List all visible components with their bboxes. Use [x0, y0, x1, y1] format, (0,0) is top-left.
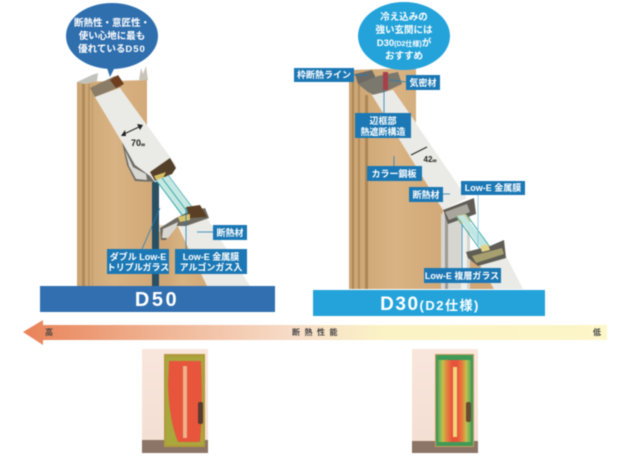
glass triple [152, 175, 195, 286]
label: airtight material: 気密材 [409, 77, 437, 88]
callout: D30 bubble: D30(D2仕様)が [377, 37, 432, 49]
dimension: 42: 42㎜ [424, 155, 436, 164]
label: color steel sheet: カラー鋼板 [371, 168, 417, 179]
callout: D30 bubble: 強い玄関には [375, 24, 433, 36]
label: color steel sheet [367, 156, 422, 181]
dimension: 70 [121, 124, 145, 148]
label: triple glass [107, 208, 169, 274]
label: Low-E metal film: Low-E 金属膜 [465, 182, 521, 193]
label: 断熱材 D50: 断熱材 [216, 227, 244, 238]
panel: D50 door section [77, 66, 250, 286]
label: Low-E double glazing [424, 224, 501, 283]
label: argon gas: アルゴンガス入 [180, 262, 242, 272]
label: edge thermal break: 辺框部 [369, 115, 397, 126]
door frame: wood face [349, 68, 443, 289]
insulation core lower [179, 218, 250, 286]
callout: D50 bubble: 断熱性・意匠性・ [74, 17, 150, 29]
callout: D30 bubble [358, 2, 450, 70]
bar: D50: D50 [135, 289, 179, 311]
label: argon gas [175, 208, 247, 274]
label: 断熱材 D50 [197, 225, 247, 240]
label: 断熱材 D30 [409, 187, 450, 202]
label: frame insulation line [294, 68, 368, 82]
dimension: 42 [411, 147, 436, 164]
label: airtight material [390, 75, 440, 90]
label: Low-E metal film [461, 181, 525, 245]
bar: D30: D30(D2仕様) [380, 294, 480, 315]
callout: D50 bubble: 使い心地に最も [79, 30, 145, 42]
door frame: wood face [77, 66, 152, 286]
thermal image: D30 door [412, 349, 478, 453]
insulation core [372, 90, 467, 210]
arrow: insulation performance scale: 低 [593, 327, 601, 337]
label: edge thermal break [355, 90, 411, 138]
label: 断熱材 D30: 断熱材 [412, 189, 440, 200]
arrow: insulation performance scale [23, 320, 607, 345]
bar: D50 [40, 286, 275, 312]
frame profile lower [160, 205, 209, 240]
thermal image: D50 door [142, 349, 208, 453]
dimension: 70: 70㎜ [131, 138, 145, 148]
callout: D30 bubble: おすすめ [385, 51, 423, 62]
arrow: insulation performance scale: 断熱性能 [292, 327, 342, 337]
arrow: insulation performance scale: 高 [45, 327, 53, 337]
label: argon gas: Low-E 金属膜 [183, 251, 239, 262]
callout: D50 bubble: 優れているD50 [78, 43, 146, 55]
wood lower [470, 260, 494, 289]
insulation core lower [478, 254, 523, 289]
callout: D50 bubble [66, 3, 158, 77]
label: frame insulation line: 枠断熱ライン [297, 69, 351, 80]
label: triple glass: トリプルガラス [107, 262, 169, 272]
insulation core upper [95, 88, 176, 180]
frame profile upper [122, 142, 176, 182]
label: triple glass: ダブル Low-E [110, 251, 166, 262]
wood lower [159, 226, 207, 286]
bar: D30 [313, 290, 545, 316]
glass and lower frame [441, 198, 490, 289]
label: Low-E double glazing: Low-E 複層ガラス [425, 270, 499, 281]
frame profile lower [466, 240, 506, 266]
label: edge thermal break: 熱遮断構造 [360, 126, 406, 137]
callout: D30 bubble: 冷え込みの [380, 11, 428, 23]
panel: D30 door section [349, 68, 523, 289]
